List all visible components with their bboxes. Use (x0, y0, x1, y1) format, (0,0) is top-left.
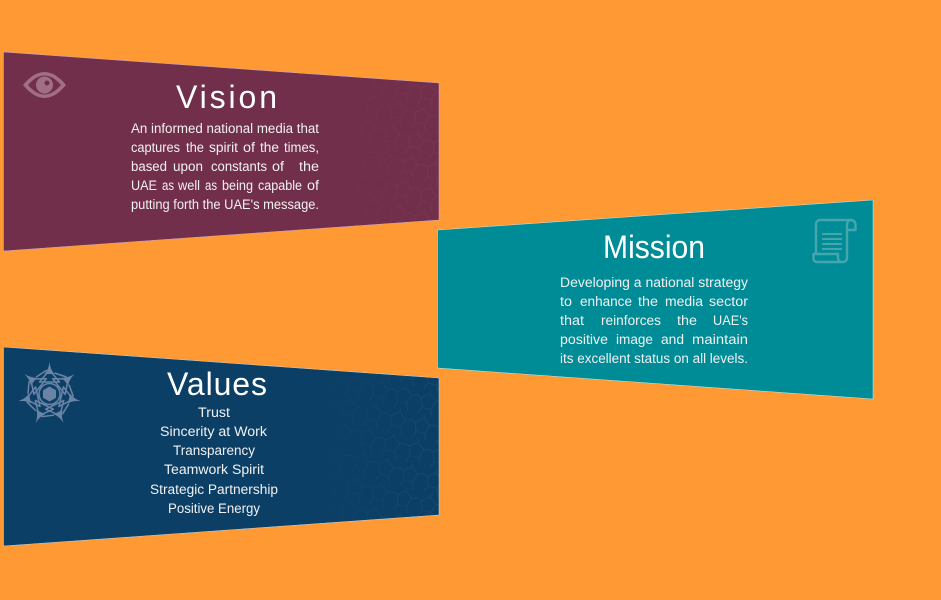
list: values: Teamwork Spirit (164, 462, 264, 477)
panel: vision (4, 52, 440, 251)
text: vision statement: times, (284, 140, 319, 155)
text: vision statement: the (260, 140, 279, 155)
text: mission statement: to (560, 294, 572, 309)
text: vision statement: spirit (209, 140, 238, 155)
text: mission statement: sector (709, 294, 749, 309)
text: mission statement: Developing a national strategy (560, 275, 748, 290)
panel: values (4, 347, 440, 546)
text: vision statement: An informed national media that (131, 121, 319, 136)
text: vision statement: constants (211, 159, 267, 174)
icon: scroll (814, 220, 856, 262)
text: mission statement: image (616, 332, 653, 347)
infographic canvas (3, 52, 874, 546)
heading: vision: Vision (176, 79, 277, 115)
list: values: Strategic Partnership (150, 482, 278, 497)
text: mission statement: that (560, 313, 584, 328)
text: vision statement: of (243, 140, 255, 155)
list: values: Trust (198, 405, 230, 420)
icon: eye (23, 72, 66, 98)
heading: values: Values (167, 366, 267, 402)
text: mission statement: reinforces (601, 313, 661, 328)
text: vision statement: upon (173, 159, 203, 174)
text: mission statement: enhance (580, 294, 632, 309)
text: mission statement: maintain (692, 332, 748, 347)
panel: mission (438, 200, 873, 399)
text: vision statement: putting forth the UAE's message. (131, 197, 319, 212)
text: vision statement: UAE (131, 178, 157, 193)
text: vision statement: well (177, 178, 200, 193)
heading: mission: Mission (603, 229, 705, 265)
text: mission statement: the (638, 294, 658, 309)
text: vision statement (131, 121, 319, 212)
text: vision statement: of (272, 159, 284, 174)
text: mission statement (560, 275, 749, 366)
text: mission statement: UAE's (713, 313, 748, 328)
list: values: Positive Energy (168, 501, 260, 516)
text: vision statement: the (186, 140, 204, 155)
text: vision statement: as (205, 178, 217, 193)
text: mission statement: the (677, 313, 697, 328)
text: mission statement: its excellent status on all levels. (560, 351, 748, 366)
text: vision statement: based (131, 159, 167, 174)
text: vision statement: captures (131, 140, 180, 155)
list: values (150, 405, 278, 516)
list: values: Transparency (173, 443, 255, 458)
text: vision statement: being (222, 178, 253, 193)
text: mission statement: positive (560, 332, 608, 347)
text: vision statement: capable (258, 178, 302, 193)
text: vision statement: as (162, 178, 174, 193)
text: mission statement: and (661, 332, 684, 347)
icon: star emblem (15, 361, 85, 430)
list: values: Sincerity at Work (160, 424, 267, 439)
text: vision statement: the (299, 159, 319, 174)
text: vision statement: of (307, 178, 319, 193)
text: mission statement: media (665, 294, 703, 309)
